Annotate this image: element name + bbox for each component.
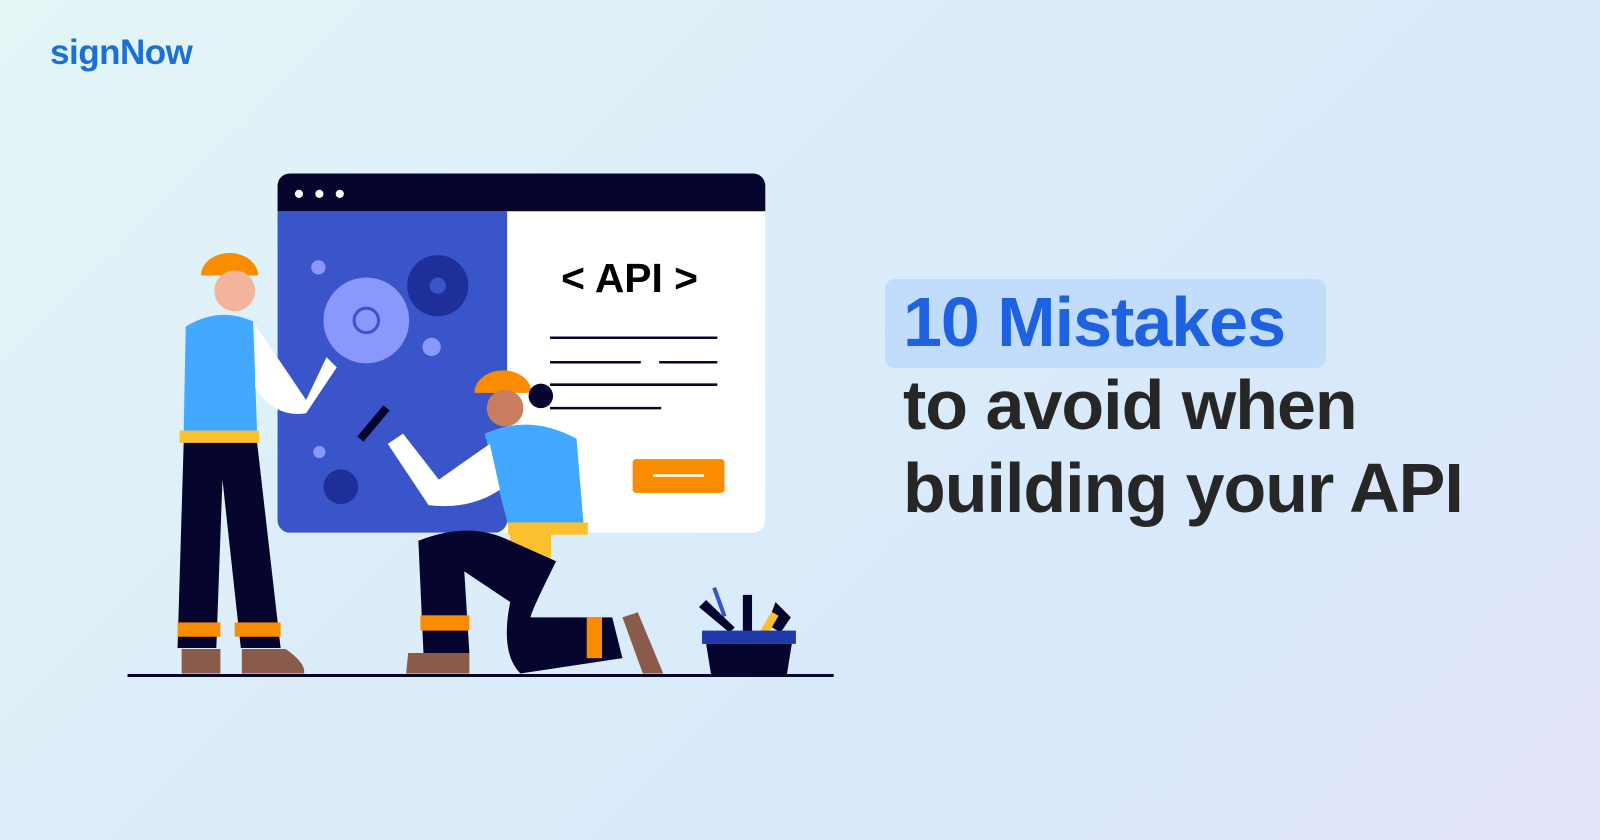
title [903, 283, 1463, 527]
title: 10 Mistakes [903, 283, 1285, 361]
icon: toolbox [699, 587, 796, 676]
logo: signNow [50, 33, 192, 72]
browser window: < API > [561, 255, 698, 301]
browser window [278, 173, 765, 533]
ground line [128, 674, 834, 677]
title: to avoid when [903, 366, 1357, 444]
title highlight box [885, 279, 1326, 368]
worker kneeling [357, 370, 663, 673]
title: building your API [903, 449, 1463, 527]
worker standing [178, 253, 337, 673]
